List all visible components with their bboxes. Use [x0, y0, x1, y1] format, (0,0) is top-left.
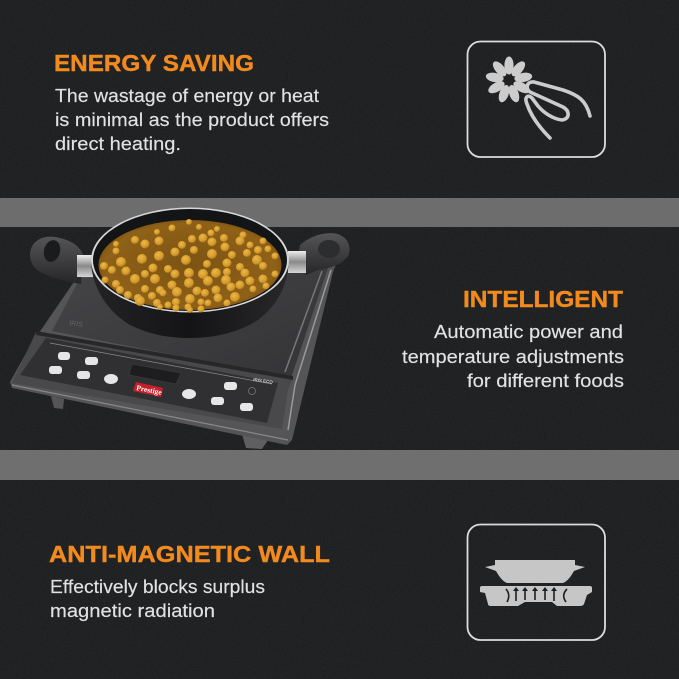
pan handle left — [30, 237, 83, 284]
intelligent description: Automatic power and — [434, 322, 623, 342]
energy saving description: direct heating. — [55, 134, 181, 154]
section: intelligent text — [402, 286, 624, 391]
section: energy saving text — [54, 50, 329, 154]
intelligent description: temperature adjustments — [402, 347, 624, 367]
cooktop glass top — [52, 262, 330, 378]
heading: intelligent: INTELLIGENT — [463, 286, 623, 312]
display — [129, 364, 181, 384]
pan bracket left — [77, 255, 93, 277]
pan rim — [91, 208, 289, 312]
anti-magnetic wall description: Effectively blocks surplus — [50, 577, 265, 597]
control panel — [12, 331, 293, 440]
cooktop foot right — [242, 434, 268, 449]
anti-magnetic wall description — [50, 577, 265, 621]
pan bracket right — [288, 251, 306, 273]
intelligent description: for different foods — [467, 371, 624, 391]
model label: IRIS ECO — [253, 377, 274, 385]
energy saving description: is minimal as the product offers — [55, 110, 329, 130]
energy saving description — [55, 86, 329, 154]
product: induction cooktop with pan — [10, 208, 350, 449]
icon: pan over induction base — [468, 524, 605, 640]
curry — [98, 220, 282, 310]
anti-magnetic wall description: magnetic radiation — [50, 601, 215, 621]
top grey band — [0, 198, 679, 227]
pan body — [91, 258, 289, 338]
heading: energy saving: ENERGY SAVING — [54, 50, 254, 76]
icon: flower and heating wire — [468, 42, 605, 157]
cooktop foot left — [51, 396, 64, 409]
control buttons — [49, 352, 253, 411]
chickpeas — [100, 219, 278, 313]
pan handle right — [299, 233, 350, 275]
brand mark on glass: IRIS — [69, 320, 84, 329]
heading: anti-magnetic wall: ANTI-MAGNETIC WALL — [49, 541, 330, 567]
energy saving description: The wastage of energy or heat — [55, 86, 319, 106]
section: anti-magnetic wall text — [49, 541, 330, 621]
power icon — [248, 388, 256, 394]
cooktop body — [10, 262, 337, 445]
intelligent description — [402, 322, 624, 391]
bottom grey band — [0, 450, 679, 480]
prestige logo: Prestige — [136, 383, 163, 397]
